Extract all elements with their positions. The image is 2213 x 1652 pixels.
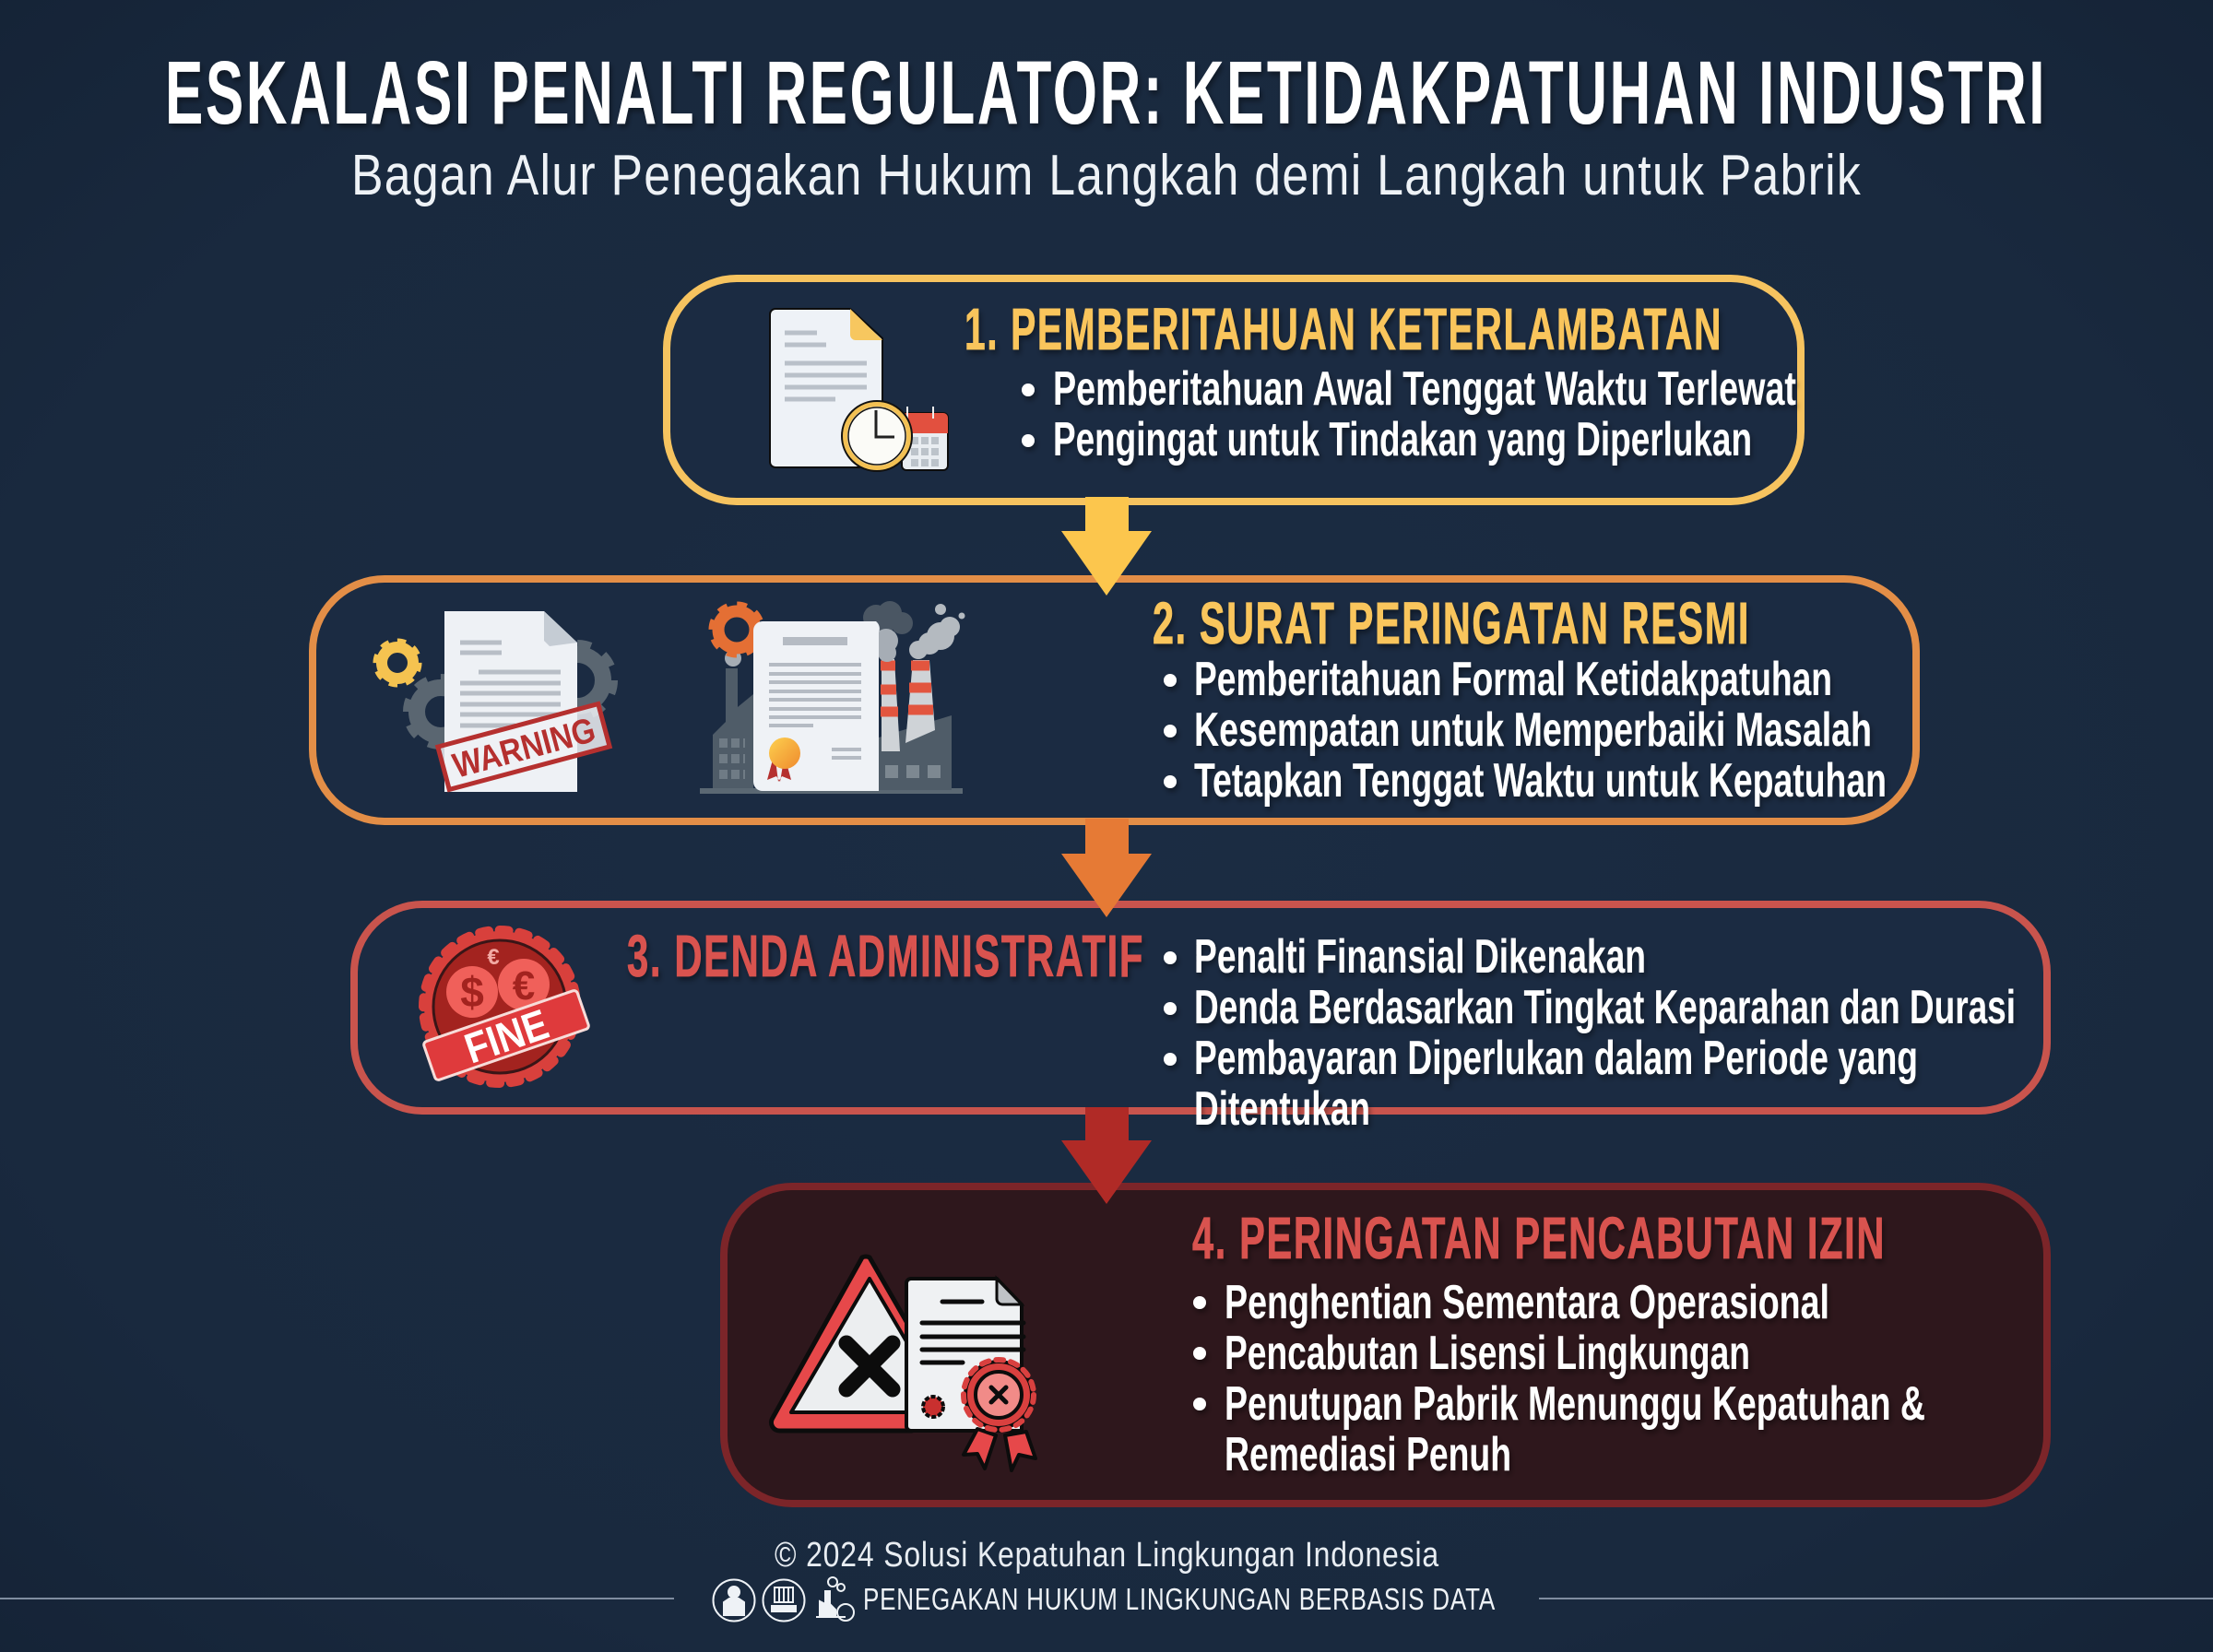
bullets: step 4: Penghentian Sementara Operasional [1225, 1276, 1829, 1329]
footer icons [714, 1577, 854, 1621]
subtitle: Bagan Alur Penegakan Hukum Langkah demi Langkah untuk Pabrik [351, 144, 1862, 207]
bullets: step 3: Pembayaran Diperlukan dalam Periode yang [1194, 1032, 1918, 1085]
bullets: step 2: Kesempatan untuk Memperbaiki Masalah [1194, 703, 1872, 757]
arrow: step 3 to 4 [1061, 1107, 1152, 1204]
bullets: step 1 [1022, 362, 1796, 466]
arrow: step 2 to 3 [1061, 819, 1152, 917]
panel: step 3 [354, 904, 2047, 1136]
icon: fine badge [422, 930, 591, 1085]
footer: left rule [0, 1598, 674, 1599]
bullets: step 4: Remediasi Penuh [1225, 1428, 1511, 1481]
bullets: step 2: Pemberitahuan Formal Ketidakpatuhan [1194, 653, 1832, 706]
footer: right rule [1539, 1598, 2213, 1599]
bullets: step 4 [1193, 1276, 1925, 1481]
icon: fine badge: $ [460, 968, 484, 1016]
heading: step 1: 1. PEMBERITAHUAN KETERLAMBATAN [964, 296, 1722, 362]
icon: fine badge: € [487, 945, 500, 970]
bullets: step 1: Pengingat untuk Tindakan yang Diperlukan [1053, 413, 1752, 466]
icon: certificate and factory [700, 601, 964, 794]
heading: step 3: 3. DENDA ADMINISTRATIF [627, 923, 1144, 989]
panel: step 4 [724, 1186, 2047, 1504]
icon: warning document with gears: WARNING [449, 711, 599, 786]
icon: document with clock and calendar [770, 309, 948, 471]
arrow: step 1 to 2 [1061, 497, 1152, 596]
panel: step 1 [667, 278, 1801, 502]
footer tagline: PENEGAKAN HUKUM LINGKUNGAN BERBASIS DATA [863, 1582, 1496, 1616]
icon: revoked permit [771, 1257, 1035, 1470]
bullets: step 2: Tetapkan Tenggat Waktu untuk Kepatuhan [1194, 754, 1887, 808]
icon: fine badge: € [513, 963, 535, 1009]
icon: warning document with gears [375, 611, 614, 792]
bullets: step 3: Penalti Finansial Dikenakan [1194, 930, 1646, 984]
bullets: step 4: Pencabutan Lisensi Lingkungan [1225, 1327, 1750, 1380]
heading: step 2: 2. SURAT PERINGATAN RESMI [1153, 590, 1750, 656]
bullets: step 3: Ditentukan [1194, 1082, 1370, 1136]
bullets: step 4: Penutupan Pabrik Menunggu Kepatuhan & [1225, 1377, 1925, 1431]
bullets: step 1: Pemberitahuan Awal Tenggat Waktu Terlewat [1053, 362, 1796, 416]
panel: step 2 [313, 579, 1916, 821]
bullets: step 3 [1164, 930, 2016, 1136]
footer copyright: © 2024 Solusi Kepatuhan Lingkungan Indonesia [775, 1536, 1439, 1575]
icon: fine badge: FINE [458, 999, 554, 1073]
bullets: step 2 [1164, 653, 1887, 808]
